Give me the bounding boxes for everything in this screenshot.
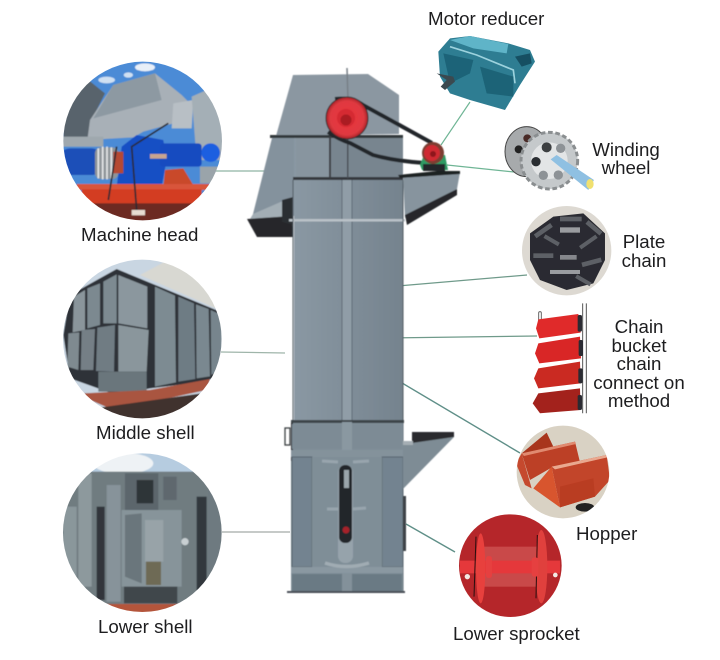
label: plate chain: chain xyxy=(622,250,666,271)
bucket 1 xyxy=(536,314,581,338)
label: chain bucket chain connection method: Chain xyxy=(615,316,663,337)
label: chain bucket chain connection method: connect on xyxy=(593,372,685,393)
label: chain bucket chain connection method: bucket xyxy=(611,335,667,356)
photo: machine head xyxy=(60,60,227,223)
icon: winding wheel xyxy=(505,127,594,190)
photo: lower shell xyxy=(60,450,227,614)
label: winding wheel: Winding xyxy=(592,139,660,160)
upper section bands xyxy=(270,135,403,138)
photo: hopper xyxy=(515,425,612,520)
top head housing xyxy=(276,74,399,136)
photo: middle shell xyxy=(63,260,222,418)
small red pulley xyxy=(422,142,444,164)
leader lines xyxy=(216,102,537,552)
label: winding wheel: wheel xyxy=(601,157,650,178)
photo: plate chain xyxy=(520,205,613,297)
label: lower sprocket: Lower sprocket xyxy=(453,623,581,644)
label: motor reducer: Motor reducer xyxy=(428,8,544,29)
label: chain bucket chain connection method: method xyxy=(608,390,670,411)
bucket elevator main body xyxy=(247,68,460,593)
feed hopper inlet xyxy=(403,432,454,551)
label: plate chain: Plate xyxy=(623,231,665,252)
bucket 3 xyxy=(534,362,581,388)
green motor mount xyxy=(420,155,448,170)
photo: lower sprocket xyxy=(457,513,565,620)
large red pulley xyxy=(326,97,368,139)
main column xyxy=(294,136,403,592)
label: middle shell: Middle shell xyxy=(96,422,195,443)
icon: motor reducer gearbox xyxy=(437,36,535,110)
lower casing xyxy=(285,420,405,593)
icon: chain buckets xyxy=(533,303,586,413)
drive belt xyxy=(328,99,432,163)
label: hopper: Hopper xyxy=(576,523,637,544)
label: lower shell: Lower shell xyxy=(98,616,193,637)
bucket 4 xyxy=(533,388,581,413)
label: chain bucket chain connection method: chain xyxy=(617,353,661,374)
left discharge chute xyxy=(253,138,296,216)
bucket 2 xyxy=(535,337,581,363)
inspection slot xyxy=(338,465,353,563)
label: machine head: Machine head xyxy=(81,224,198,245)
black discharge spout xyxy=(247,216,293,237)
right motor shelf xyxy=(403,172,460,218)
